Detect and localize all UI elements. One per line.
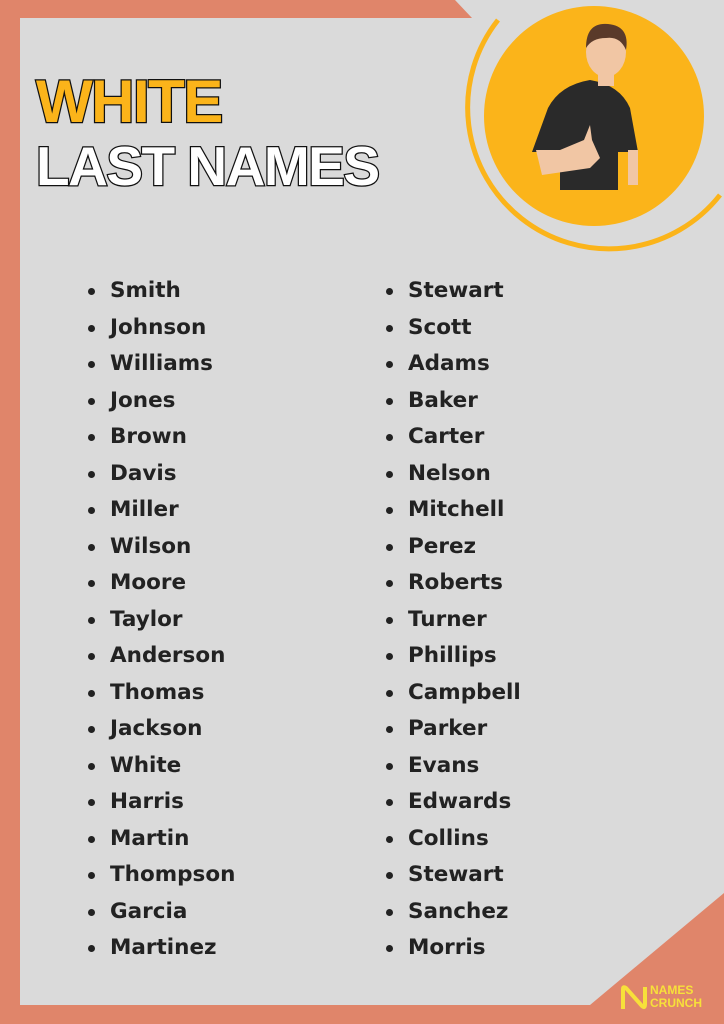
list column 2 [386, 278, 521, 960]
list column 1: Harris [110, 789, 184, 814]
list column 1: Taylor [110, 606, 182, 632]
list column 1: Martin [110, 826, 189, 850]
logo: NAMES [650, 983, 693, 997]
list column 2: Parker [408, 716, 487, 741]
list column 1: White [110, 752, 181, 778]
title: WHITE [36, 68, 222, 135]
list column 1: Jackson [110, 716, 202, 741]
illustration: man with thumbs up in yellow circle [465, 6, 722, 252]
title: LAST NAMES [36, 135, 378, 197]
list column 1: Moore [110, 570, 186, 595]
list column 2: Morris [408, 935, 486, 960]
list column 1: Johnson [110, 314, 206, 340]
list column 2: Adams [408, 351, 490, 376]
list column 1: Martinez [110, 935, 217, 960]
list column 2: Evans [408, 752, 479, 778]
list column 2: Stewart [408, 862, 504, 887]
list column 2: Nelson [408, 460, 491, 486]
list column 2: Carter [408, 424, 484, 449]
logo: CRUNCH [650, 996, 702, 1010]
list column 2: Sanchez [408, 898, 508, 924]
list column 2: Collins [408, 826, 489, 850]
list column 2: Mitchell [408, 497, 504, 522]
title [34, 68, 380, 197]
list column 1: Williams [110, 351, 213, 376]
list column 2: Edwards [408, 789, 511, 814]
list column 2: Baker [408, 388, 478, 412]
list column 1: Thomas [110, 680, 204, 704]
list column 2: Campbell [408, 680, 521, 704]
list column 1: Jones [110, 388, 175, 412]
list column 1: Garcia [110, 898, 187, 924]
list column 2: Stewart [408, 278, 504, 303]
list column 1: Brown [110, 424, 187, 449]
list column 1: Smith [110, 278, 181, 303]
list column 1 [88, 278, 235, 960]
list column 2: Turner [408, 606, 487, 632]
list column 2: Scott [408, 314, 472, 340]
list column 1: Miller [110, 497, 179, 522]
list column 2: Roberts [408, 570, 503, 595]
logo [621, 983, 702, 1010]
list column 1: Anderson [110, 643, 225, 668]
list column 1: Wilson [110, 534, 191, 558]
list column 2: Perez [408, 534, 476, 558]
list column 1: Thompson [110, 862, 235, 887]
list column 2: Phillips [408, 643, 497, 668]
list column 1: Davis [110, 460, 177, 486]
